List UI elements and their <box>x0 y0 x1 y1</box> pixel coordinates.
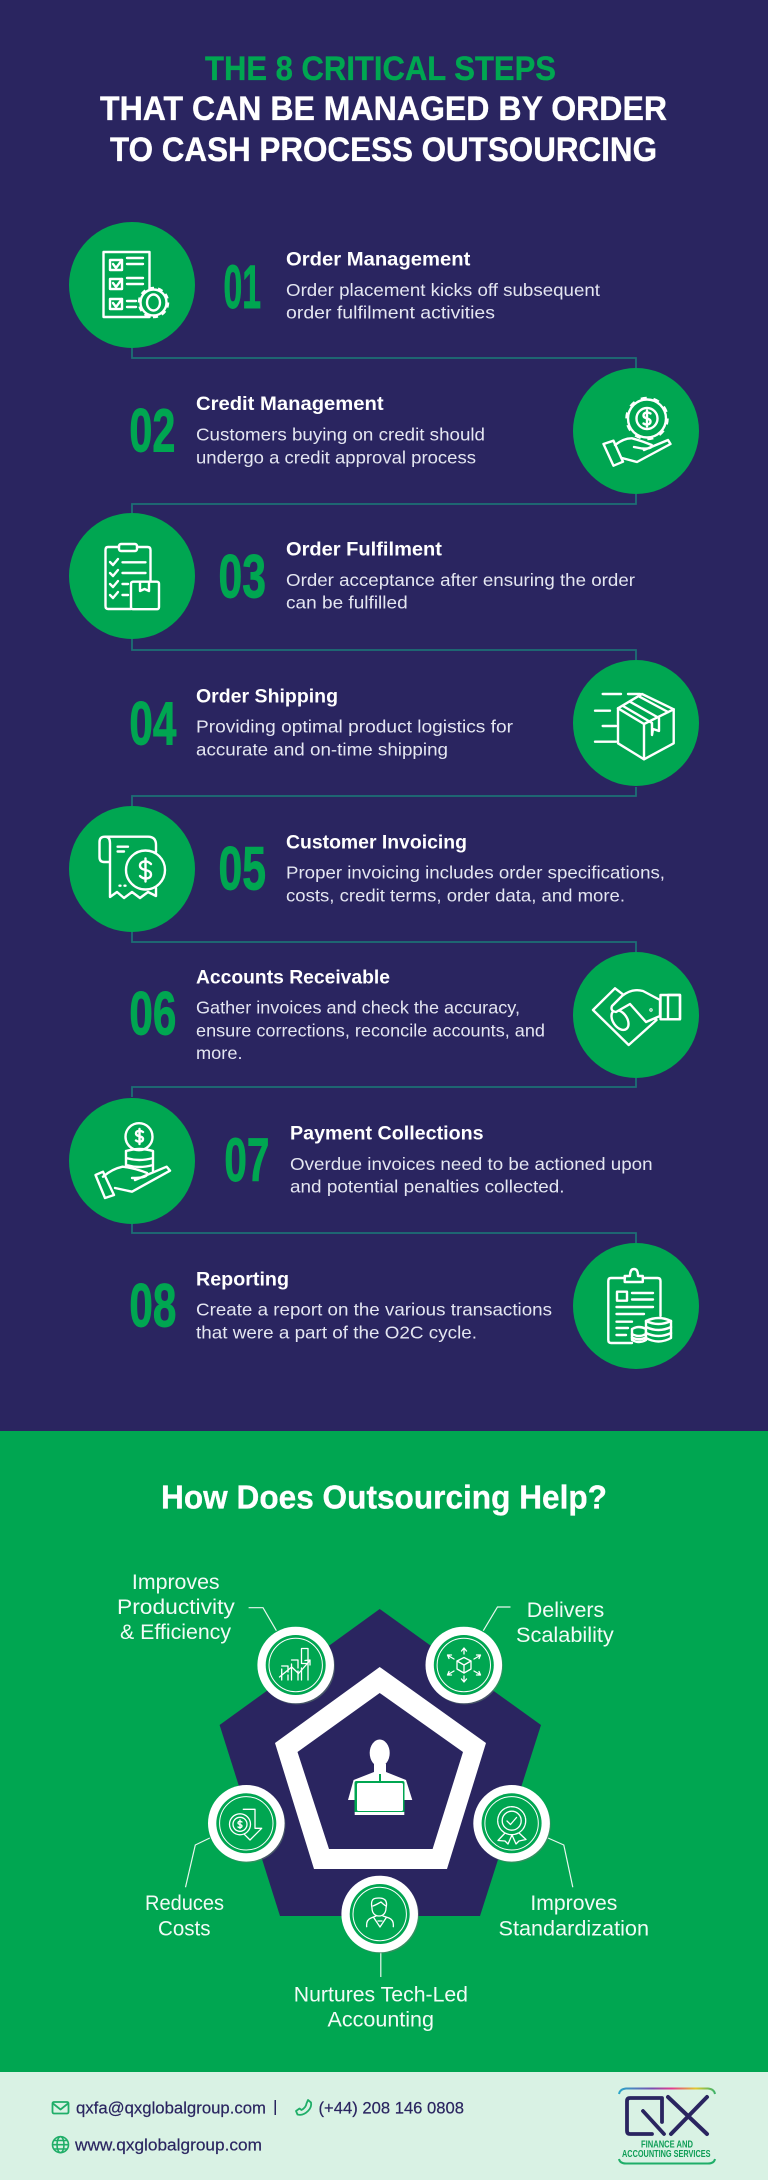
title: THE 8 CRITICAL STEPS <box>205 50 556 88</box>
step 7 text: Payment Collections <box>290 1122 484 1144</box>
step 3 badge <box>69 513 195 639</box>
step 3 text: Order acceptance after ensuring the order <box>286 570 635 590</box>
label: Improves <box>132 1571 220 1594</box>
step number 02: 02 <box>129 397 175 465</box>
label <box>516 1599 614 1647</box>
step 6 text: more. <box>196 1043 242 1063</box>
step 7 badge <box>69 1098 195 1224</box>
icon: email <box>52 2102 68 2114</box>
panel: outsourcing background <box>0 1431 768 2072</box>
benefit: improves productivity <box>117 1571 335 1704</box>
step 5 text: costs, credit terms, order data, and more. <box>286 885 625 905</box>
step 2 badge <box>573 368 699 494</box>
step 6 text <box>196 966 545 1063</box>
step 2: credit management <box>129 368 699 494</box>
website: www.qxglobalgroup.com <box>74 2136 262 2155</box>
email address: qxfa@qxglobalgroup.com <box>76 2098 266 2117</box>
label <box>145 1892 224 1941</box>
icon: speeding parcel <box>595 694 674 759</box>
connector lines between steps <box>132 348 636 1243</box>
step 1 badge <box>69 222 195 348</box>
label <box>498 1892 649 1941</box>
logo: QX finance and accounting services <box>619 2088 715 2164</box>
step 3 text: Order Fulfilment <box>286 539 443 561</box>
step 8 text: Reporting <box>196 1268 289 1290</box>
icon: person at laptop <box>348 1740 412 1815</box>
step 2 text <box>196 393 485 467</box>
step 1 text: order fulfilment activities <box>286 303 495 323</box>
step 8 text: that were a part of the O2C cycle. <box>196 1322 477 1342</box>
step 7 text: and potential penalties collected. <box>290 1177 564 1197</box>
standardization badge <box>473 1785 551 1863</box>
icon: falling dollar arrow <box>230 1809 262 1840</box>
step 4 text: Order Shipping <box>196 685 338 707</box>
benefit: delivers scalability <box>426 1599 614 1704</box>
footer contact details <box>52 2098 464 2155</box>
step number 01: 01 <box>224 253 261 321</box>
label: Accounting <box>328 2009 434 2032</box>
step 3 text: can be fulfilled <box>286 593 408 613</box>
step 8 text: Create a report on the various transactions <box>196 1300 552 1320</box>
icon: globe <box>52 2137 68 2153</box>
step 1 text: Order placement kicks off subsequent <box>286 280 600 300</box>
step number 07: 07 <box>224 1126 269 1194</box>
step 2 text: Credit Management <box>196 393 384 415</box>
step 5 text <box>286 831 665 905</box>
step 3 text <box>286 539 635 613</box>
logo: QX finance and accounting services: ACCOUNTING SERVICES <box>622 2148 710 2160</box>
icon: quality rosette <box>498 1807 526 1844</box>
step 5 text: Customer Invoicing <box>286 831 467 853</box>
step 6 text: Accounts Receivable <box>196 966 390 988</box>
step number 05: 05 <box>218 834 266 902</box>
step 6 text: Gather invoices and check the accuracy, <box>196 997 520 1017</box>
title: THAT CAN BE MANAGED BY ORDER <box>100 90 667 128</box>
step 4 text <box>196 685 513 760</box>
step 8 text <box>196 1268 552 1342</box>
step 3: order fulfilment <box>69 513 635 639</box>
icon: clipboard with parcel <box>106 544 159 609</box>
benefit: improves standardization <box>473 1785 649 1941</box>
label: Productivity <box>117 1596 235 1619</box>
step 1 text: Order Management <box>286 249 471 271</box>
title <box>100 50 667 169</box>
step 8: reporting <box>129 1243 699 1369</box>
title: TO CASH PROCESS OUTSOURCING <box>110 131 657 169</box>
step 6 badge <box>573 952 699 1078</box>
icon: phone <box>296 2100 311 2115</box>
step number 08: 08 <box>129 1272 176 1340</box>
step 4: order shipping <box>129 660 699 786</box>
step 1 text <box>286 249 600 323</box>
step number 04: 04 <box>129 689 176 757</box>
benefit: reduces costs <box>145 1785 286 1941</box>
step 7: payment collections <box>69 1098 653 1224</box>
phone number: (+44) 208 146 0808 <box>318 2098 464 2117</box>
step 5 badge <box>69 806 195 932</box>
separator <box>274 2100 276 2115</box>
leader lines <box>186 1607 573 1977</box>
label: Standardization <box>498 1918 649 1941</box>
icon: hand with coin stack <box>96 1123 170 1198</box>
icon: expanding cube <box>448 1648 480 1682</box>
icon: checklist with gear <box>104 252 168 317</box>
step 2 text: Customers buying on credit should <box>196 425 485 445</box>
label: Delivers <box>527 1599 604 1622</box>
step number 06: 06 <box>129 979 176 1047</box>
step 4 text: Providing optimal product logistics for <box>196 717 513 737</box>
step 6 text: ensure corrections, reconcile accounts, and <box>196 1020 545 1040</box>
step number 03: 03 <box>218 543 266 611</box>
step 4 text: accurate and on-time shipping <box>196 740 448 760</box>
step 6: accounts receivable <box>129 952 699 1078</box>
step 4 badge <box>573 660 699 786</box>
productivity badge <box>257 1627 335 1704</box>
label: Reduces <box>145 1892 224 1915</box>
costs badge <box>208 1785 286 1863</box>
label <box>294 1984 468 2032</box>
icon: hand holding gear <box>604 398 670 466</box>
step 7 text: Overdue invoices need to be actioned upon <box>290 1154 653 1174</box>
benefit: nurtures tech-led accounting <box>294 1876 468 2032</box>
navy outer pentagon <box>220 1609 541 1916</box>
icon: report clipboard with coins <box>608 1269 671 1343</box>
step 5 text: Proper invoicing includes order specifications, <box>286 863 665 883</box>
label: & Efficiency <box>120 1621 232 1644</box>
white pentagon frame <box>275 1667 486 1869</box>
logo: QX finance and accounting services: FINANCE AND <box>641 2138 693 2150</box>
icon: hand passing money <box>593 988 680 1045</box>
panel: steps background <box>0 0 768 1431</box>
pentagon diagram <box>220 1609 541 1916</box>
step 5: customer invoicing <box>69 806 665 932</box>
step 2 text: undergo a credit approval process <box>196 447 476 467</box>
step 8 badge <box>573 1243 699 1369</box>
panel: footer background <box>0 2072 768 2180</box>
scalability badge <box>426 1627 503 1704</box>
step 7 text <box>290 1122 653 1197</box>
icon: growth chart <box>280 1648 310 1680</box>
accounting badge <box>341 1876 419 1954</box>
label <box>117 1571 235 1644</box>
icon: businesswoman <box>367 1898 393 1927</box>
heading: how does outsourcing help: How Does Outsourcing Help? <box>161 1479 607 1516</box>
icon: invoice with dollar coin <box>100 837 165 898</box>
label: Nurtures Tech-Led <box>294 1984 468 2007</box>
label: Scalability <box>516 1624 614 1647</box>
label: Improves <box>530 1892 617 1915</box>
label: Costs <box>158 1918 210 1941</box>
step 1: order management <box>69 222 600 348</box>
